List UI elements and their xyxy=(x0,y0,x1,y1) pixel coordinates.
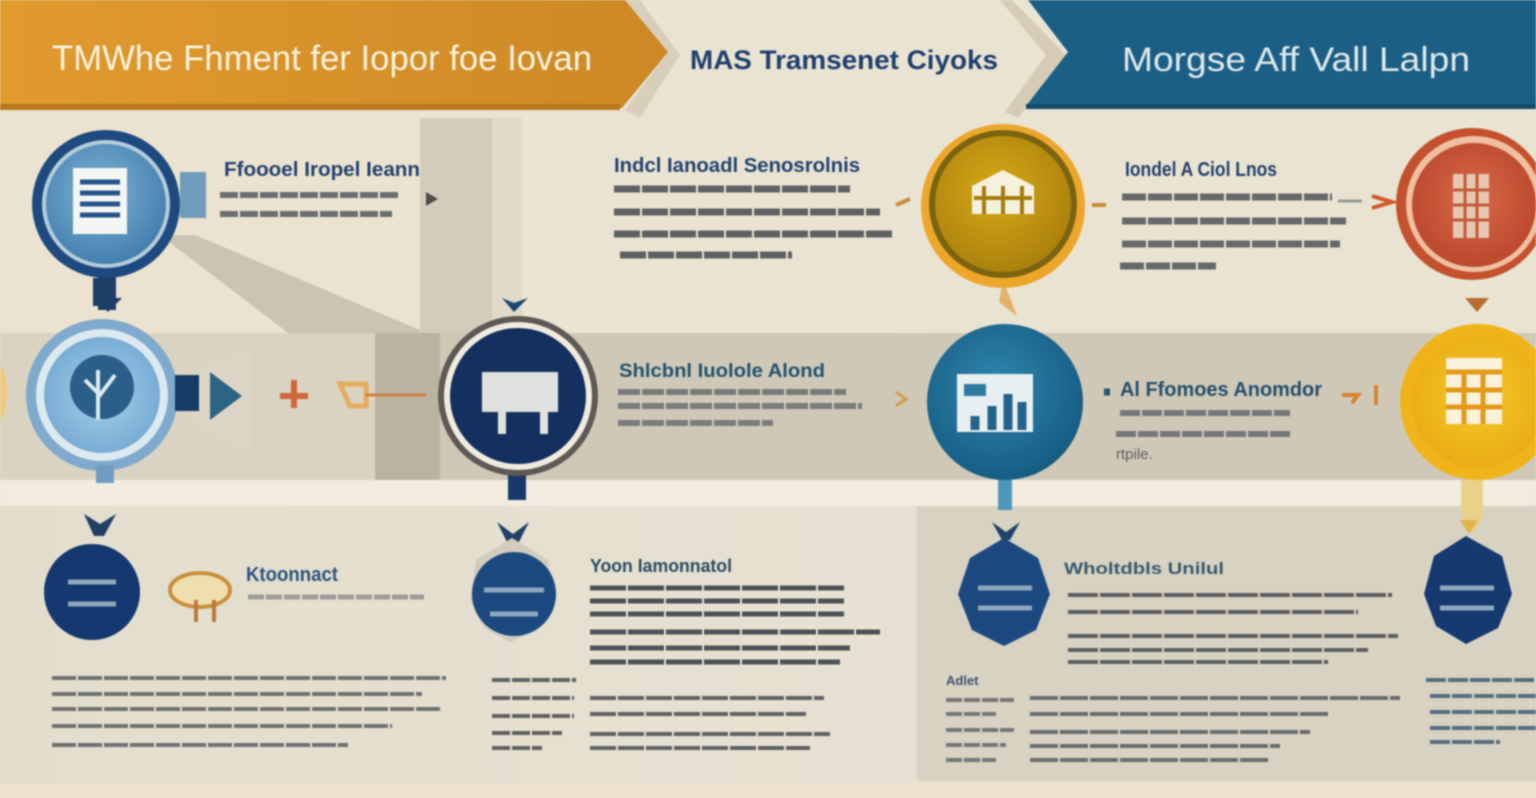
title: teal header: Morgse Aff Vall Lalpn xyxy=(1122,41,1470,79)
text block: lower 3: Wholtdbls Unilul xyxy=(1064,559,1224,578)
node: globe xyxy=(0,278,252,483)
node: teal chart xyxy=(896,324,1083,510)
badge: lower 1 xyxy=(44,514,140,640)
text block: centre item: Shlcbnl Iuolole Alond xyxy=(619,361,825,382)
text block: upper centre item: Indcl Ianoadl Senosrolnis xyxy=(614,155,860,177)
text block: first item: Ffoooel Iropel Ieann xyxy=(224,159,420,181)
badge: lower 3 xyxy=(958,522,1050,646)
badge: lower 2 xyxy=(470,522,556,642)
text block: upper centre item xyxy=(614,155,894,255)
text block: lower 2 xyxy=(492,556,880,748)
text block: lower 3 xyxy=(946,559,1400,760)
text block: lower 2: Yoon Iamonnatol xyxy=(590,556,732,576)
text block: upper right item xyxy=(1120,159,1392,266)
title: orange header: TMWhe Fhment fer Iopor foe Iovan xyxy=(52,39,592,78)
text block: centre right item: rtpile. xyxy=(1116,446,1153,463)
text block: centre right item xyxy=(1104,379,1376,463)
node: yellow building xyxy=(1400,324,1536,534)
header arrow: beige middle xyxy=(680,0,1066,125)
text block: lower 1: Ktoonnact xyxy=(246,564,338,586)
text block: centre item xyxy=(618,361,862,423)
connector arrows xyxy=(280,380,426,408)
node: navy cow icon xyxy=(438,298,598,500)
text block: upper right item: Iondel A Ciol Lnos xyxy=(1125,159,1277,181)
title: middle header: MAS Tramsenet Ciyoks xyxy=(690,45,998,75)
text block: lower 3: Adlet xyxy=(946,673,979,688)
header arrow: teal xyxy=(1026,0,1536,109)
text block: centre right item: Al Ffomoes Anomdor xyxy=(1120,379,1322,401)
header arrow: orange xyxy=(0,0,680,118)
text block: lower 1 xyxy=(52,564,446,745)
node: red document xyxy=(1396,128,1536,312)
badge: lower 4 xyxy=(1424,520,1512,644)
node: document icon xyxy=(32,130,206,310)
text block: lower 4 xyxy=(1426,680,1536,742)
node: gold building xyxy=(896,124,1106,316)
text block: first item xyxy=(220,159,438,214)
icon: bowl xyxy=(170,573,230,622)
